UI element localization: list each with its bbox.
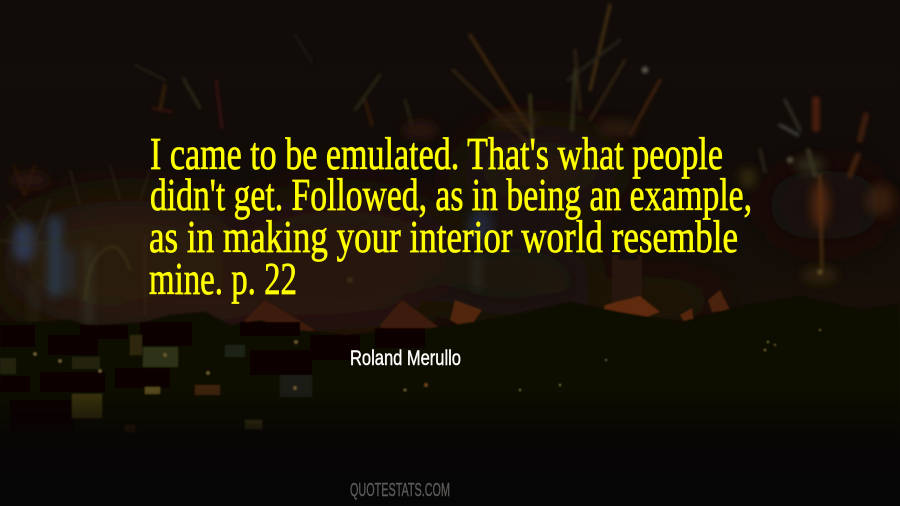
town speckle lights bbox=[33, 329, 821, 392]
bottom fade bbox=[0, 390, 900, 506]
right side rockets bbox=[760, 100, 866, 270]
site credit: QUOTESTATS.COM bbox=[350, 479, 450, 500]
firework streaks bbox=[0, 5, 866, 315]
quote text bbox=[149, 128, 752, 304]
church tower bbox=[612, 255, 642, 307]
blue firework columns, left bbox=[13, 209, 492, 325]
town rooftops bbox=[0, 222, 900, 506]
left arc fountains bbox=[0, 165, 150, 315]
firework bursts bbox=[10, 112, 894, 283]
author name: Roland Merullo bbox=[350, 347, 461, 370]
lit windows bbox=[143, 347, 178, 367]
quote line 3: as in making your interior world resemble bbox=[149, 211, 738, 262]
centre fan streaks bbox=[453, 5, 660, 145]
dark town mass bbox=[0, 296, 900, 506]
upper left streaks bbox=[135, 35, 412, 128]
firework glow haze bbox=[0, 125, 885, 331]
quote line 4: mine. p. 22 bbox=[149, 253, 297, 304]
glowing orange roofs bbox=[245, 300, 315, 335]
small star sparks bbox=[348, 67, 822, 282]
dark roof blocks bbox=[0, 325, 35, 347]
